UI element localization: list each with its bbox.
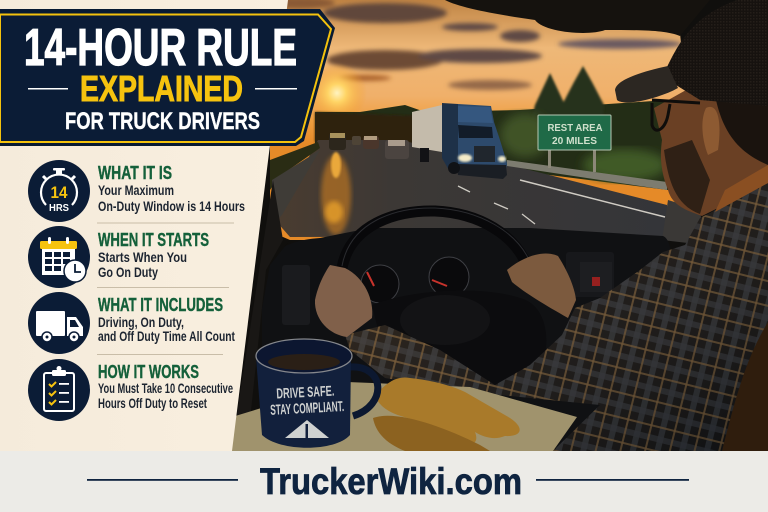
heading: HOW IT WORKS: [98, 362, 199, 382]
semi truck: [412, 103, 507, 179]
icon: stopwatch 14 hrs: [28, 160, 90, 222]
item: when it starts: [28, 226, 209, 288]
road sign: rest area: 20 MILES: [552, 135, 597, 147]
driver body with plaid shirt: [345, 183, 768, 451]
road reflection: [321, 155, 351, 235]
description: [98, 250, 187, 280]
coffee mug: STAY COMPLIANT.: [270, 399, 345, 419]
steering wheel: [342, 208, 546, 398]
item: what it is: [28, 160, 245, 222]
dash vent: [282, 265, 310, 325]
leather gloves: [373, 377, 520, 451]
title line 1: 14-HOUR RULE: [24, 19, 297, 77]
description: Your Maximum: [98, 183, 174, 198]
road sign: rest area: REST AREA: [548, 122, 603, 134]
a-pillar: [236, 180, 283, 420]
description: [98, 381, 233, 411]
description: [98, 183, 245, 214]
windshield sky: [270, 0, 700, 240]
icon: delivery truck: [28, 292, 90, 354]
coffee mug: [256, 339, 378, 448]
icon: stopwatch 14 hrs: 14: [50, 183, 68, 202]
dashboard: [262, 228, 680, 452]
coffee mug: DRIVE SAFE.: [276, 384, 335, 403]
heading: WHAT IT IS: [98, 163, 172, 183]
driver's hand: left on wheel: [315, 265, 372, 337]
road sign: rest area: [538, 115, 611, 172]
driver head: [652, 85, 768, 216]
icon: clipboard checklist: [28, 359, 90, 421]
description: Starts When You: [98, 250, 187, 265]
photo: cab interior at sunset: [220, 0, 768, 452]
visor: [445, 0, 710, 36]
item: what it includes: [28, 292, 235, 354]
description: and Off Duty Time All Count: [98, 329, 235, 344]
description: Hours Off Duty to Reset: [98, 396, 207, 411]
heading: WHAT IT INCLUDES: [98, 295, 223, 315]
item: how it works: [28, 359, 233, 421]
description: [98, 315, 235, 344]
trucker cap: [615, 0, 768, 106]
sunset clouds: [265, 0, 682, 90]
title line 2: EXPLAINED: [80, 68, 243, 109]
guardrail: [507, 160, 667, 190]
icon: stopwatch 14 hrs: HRS: [49, 202, 69, 214]
traffic cars: [329, 133, 409, 159]
footer band: [0, 451, 768, 512]
seat edge: [722, 322, 768, 451]
road map on dash: [230, 382, 577, 451]
description: You Must Take 10 Consecutive: [98, 381, 233, 396]
heading: WHEN IT STARTS: [98, 230, 209, 250]
icon: calendar with clock: [28, 226, 90, 288]
setting sun: [307, 63, 367, 123]
title banner: [0, 9, 335, 146]
driver's hand: right on wheel: [507, 254, 576, 318]
description: Driving, On Duty,: [98, 315, 184, 330]
highway: [275, 140, 667, 237]
website name: TruckerWiki.com: [260, 461, 522, 502]
center console: [566, 252, 614, 297]
description: On-Duty Window is 14 Hours: [98, 199, 245, 214]
panel: cream sidebar: [0, 0, 288, 451]
gauges: [361, 257, 469, 303]
lane lines: [458, 180, 665, 224]
right pillar: [662, 200, 705, 245]
hills and trees: [315, 66, 668, 190]
glasses: [652, 100, 700, 130]
description: Go On Duty: [98, 265, 158, 280]
title line 3: FOR TRUCK DRIVERS: [65, 108, 260, 135]
